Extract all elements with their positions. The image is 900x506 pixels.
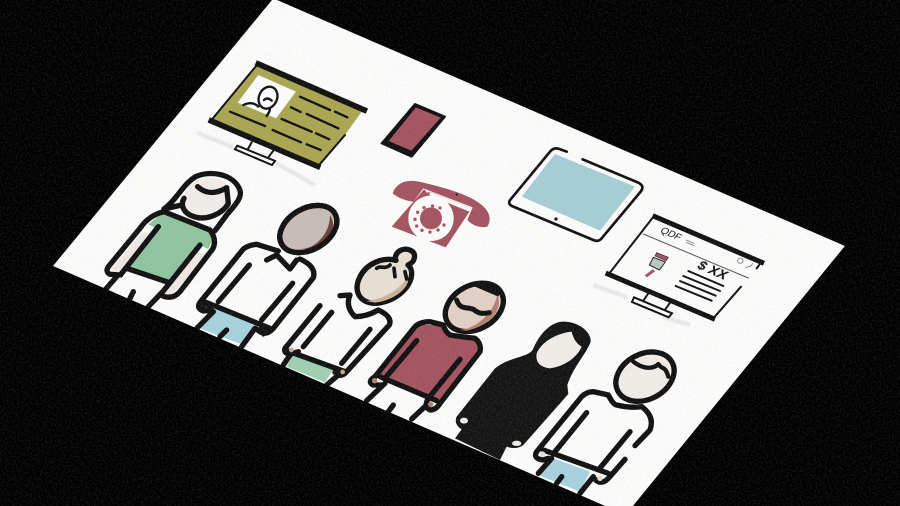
figure: woman with hair bun	[283, 249, 415, 385]
icon: tablet	[509, 148, 642, 241]
body outline	[367, 322, 480, 419]
label: price: $ XX	[694, 258, 733, 282]
label: brand logo: QDF	[657, 226, 684, 243]
icon: rotary telephone	[392, 181, 490, 247]
shirt	[127, 212, 213, 282]
black area below the sheet	[0, 243, 605, 506]
face	[536, 332, 582, 368]
figure: man in white shirt and blue shorts	[197, 196, 345, 347]
head and bun	[357, 249, 415, 303]
figure: woman in green shirt	[105, 171, 240, 307]
figure: man with moustache in maroon sweater	[367, 274, 512, 419]
icon: monitor with profile	[198, 63, 364, 184]
body outline	[197, 244, 314, 347]
figure: woman in black hijab	[455, 322, 591, 460]
cuffs	[202, 302, 272, 335]
sweater	[377, 325, 480, 402]
icon: product	[645, 253, 668, 277]
head	[271, 196, 345, 262]
head	[437, 274, 512, 341]
collar	[267, 255, 297, 269]
icon: monitor with product page	[593, 216, 762, 325]
icon: smartphone	[382, 104, 445, 157]
head	[607, 342, 683, 411]
hair and face	[178, 171, 236, 224]
body outline	[536, 392, 651, 493]
shorts	[200, 308, 255, 345]
figure: man in white shirt on the right	[536, 342, 683, 493]
body outline	[283, 295, 390, 385]
